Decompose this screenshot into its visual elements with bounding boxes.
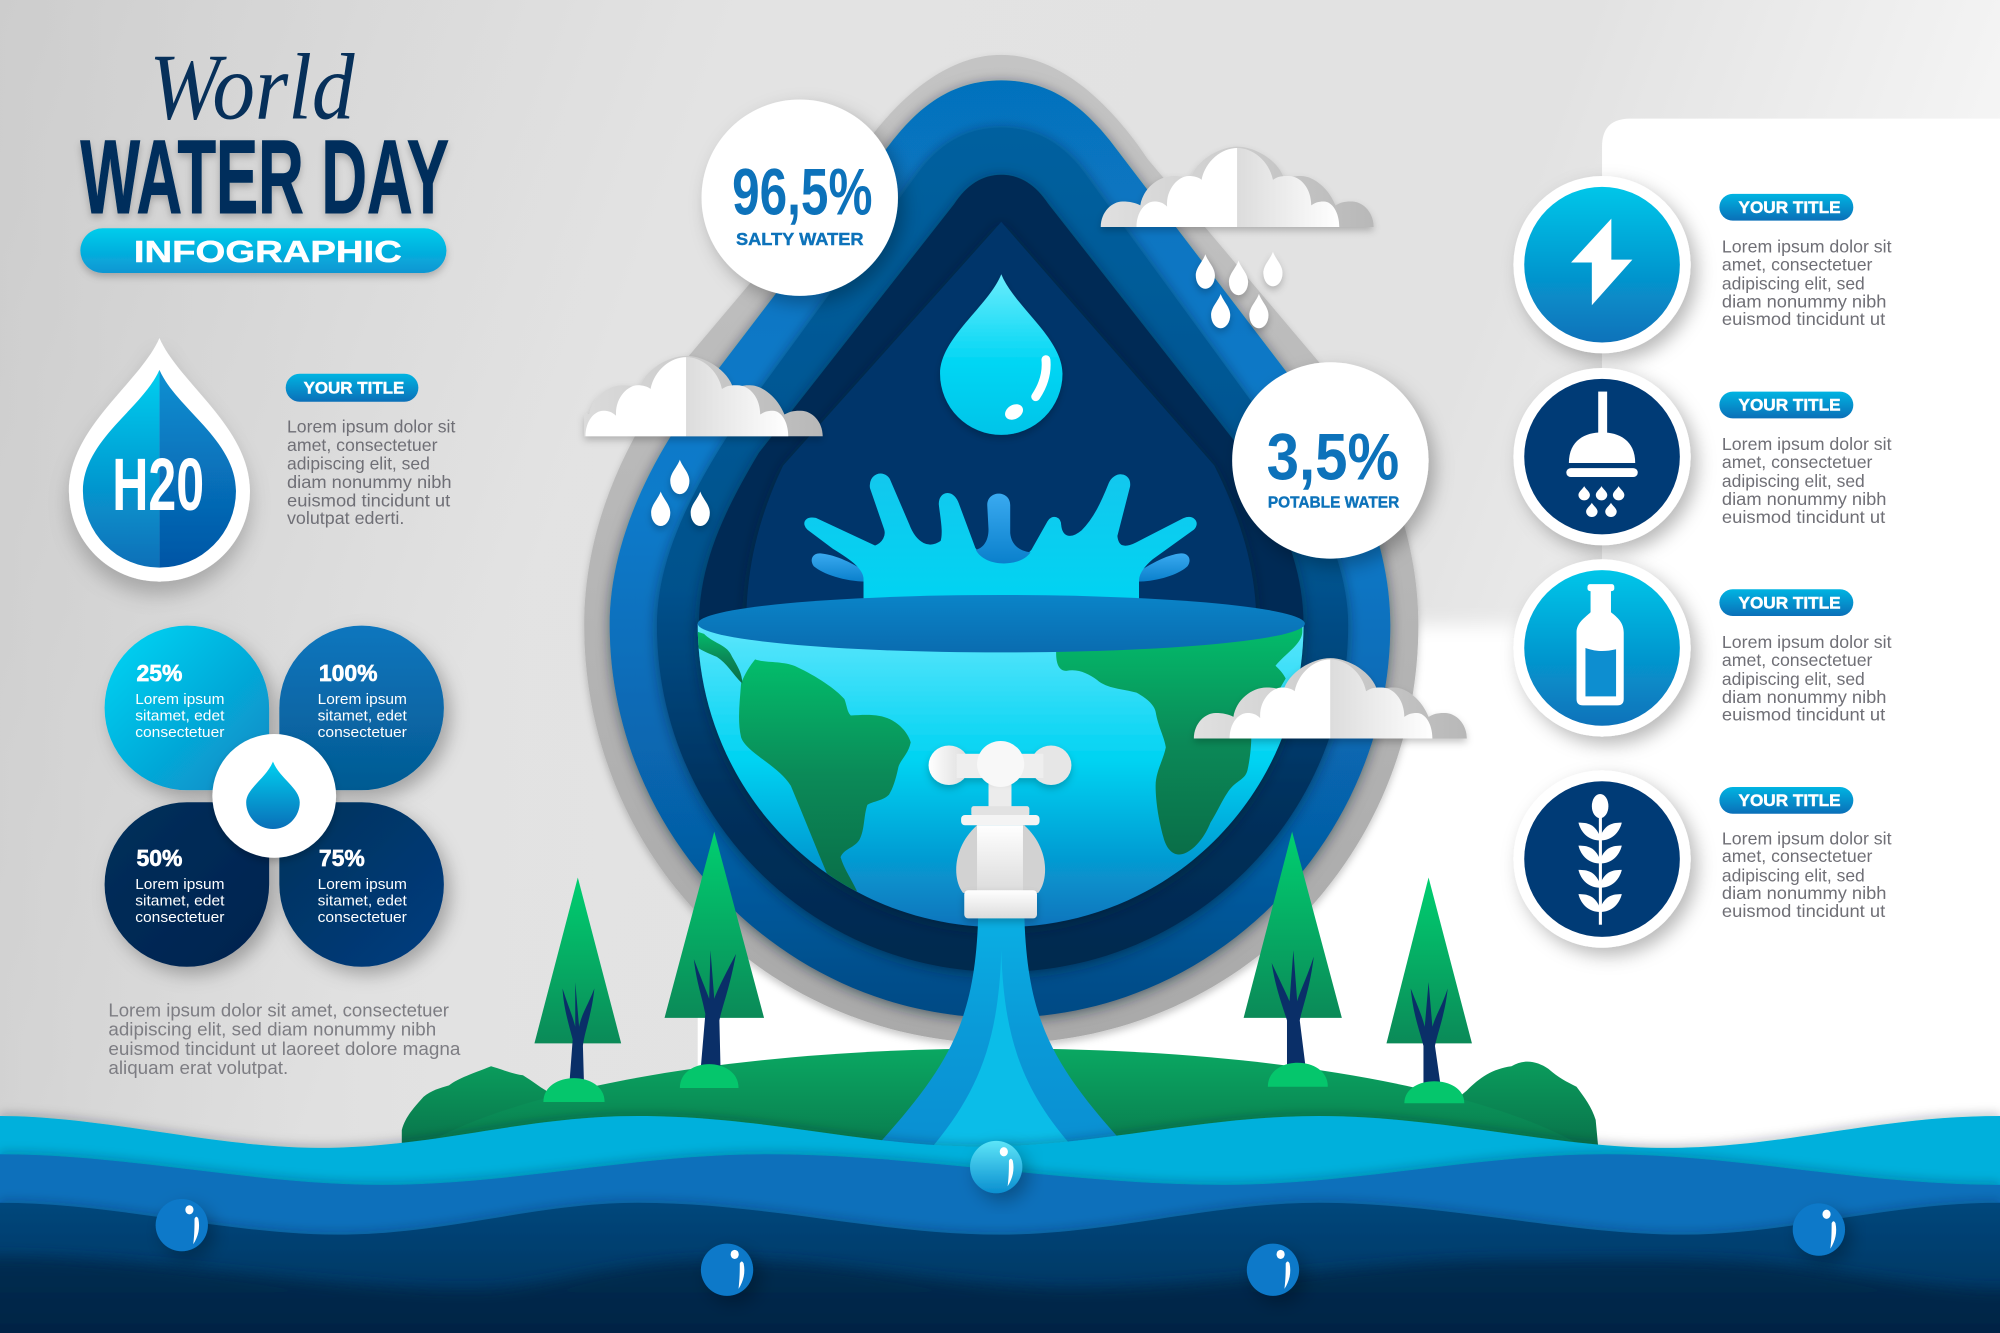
text: adipiscing elit, sed [1722, 471, 1865, 491]
labels 50%: sitamet, edet [135, 893, 225, 910]
bubble: potable water: 3,5% [1267, 421, 1399, 495]
text: amet, consectetuer [1722, 254, 1873, 274]
text: euismod tincidunt ut [1722, 309, 1885, 329]
petal 25% [105, 626, 269, 790]
H2O drop badge: H20 [112, 443, 204, 526]
text: Lorem ipsum dolor sit [1722, 434, 1892, 454]
labels 25%: 25% [136, 660, 182, 686]
continent: americas [696, 631, 911, 892]
water stream [875, 912, 1128, 1154]
bubble: potable water [1232, 362, 1429, 559]
bottom-left text block: Lorem ipsum dolor sit amet, consectetuer [108, 1000, 449, 1021]
text: euismod tincidunt ut [1722, 705, 1885, 725]
labels 75%: 75% [319, 845, 365, 871]
text: adipiscing elit, sed [1722, 865, 1865, 885]
outer grey layer [584, 55, 1418, 1043]
text: Lorem ipsum dolor sit [1722, 237, 1892, 257]
title block [80, 36, 449, 273]
text [1719, 589, 1892, 725]
water splash [808, 477, 1193, 606]
percent clover panel [105, 626, 444, 967]
labels 75%: sitamet, edet [318, 893, 408, 910]
icon: lightning [1513, 176, 1691, 353]
text: adipiscing elit, sed [1722, 274, 1865, 294]
trees [534, 832, 1472, 1103]
title: WATER DAY: WATER DAY [80, 119, 449, 236]
continent: africa [1056, 625, 1302, 855]
labels 100%: sitamet, edet [318, 708, 408, 725]
labels 50%: 50% [136, 845, 182, 871]
right list item 2: shower [1513, 368, 1892, 545]
labels 75% [318, 845, 408, 926]
labels 100% [318, 660, 408, 741]
water droplets on the ocean [156, 1141, 1845, 1296]
icon: bottle [1513, 559, 1691, 737]
cloud lower right [1194, 658, 1467, 739]
labels 25%: Lorem ipsum [135, 691, 224, 708]
bush right [1429, 1062, 1599, 1161]
bottom-left text block: euismod tincidunt ut laoreet dolore magna [108, 1038, 461, 1059]
title: World: World [149, 36, 355, 140]
bottom-left text block: adipiscing elit, sed diam nonummy nibh [108, 1019, 436, 1040]
icon: wheat [1513, 770, 1691, 948]
cloud left with rain [550, 356, 823, 526]
text: adipiscing elit, sed [1722, 669, 1865, 689]
bubble: salty water: SALTY WATER [736, 229, 864, 249]
labels 50% [135, 845, 225, 926]
H2O text block: adipiscing elit, sed [287, 453, 430, 473]
H2O text block: Lorem ipsum dolor sit [287, 416, 456, 436]
subtitle pill [80, 228, 446, 273]
bush left [402, 1066, 574, 1161]
blue layer [610, 80, 1390, 1018]
bubble: potable water: POTABLE WATER [1268, 495, 1400, 512]
tree 1 [534, 878, 621, 1091]
petal 75% [279, 802, 444, 967]
globe bowl [696, 595, 1305, 927]
mid blue layer [657, 128, 1348, 972]
text: YOUR TITLE [1739, 593, 1841, 612]
H2O text block [286, 374, 456, 528]
bottom-left text block: aliquam erat volutpat. [108, 1057, 288, 1078]
center drop [212, 734, 336, 858]
text: amet, consectetuer [1722, 650, 1873, 670]
text: YOUR TITLE [1739, 198, 1841, 217]
text: diam nonummy nibh [1722, 291, 1886, 311]
H2O text block: euismod tincidunt ut [287, 490, 450, 510]
cloud top right with rain [1101, 147, 1374, 328]
text: YOUR TITLE [1739, 396, 1841, 415]
subtitle pill: INFOGRAPHIC [134, 235, 402, 269]
labels 100%: 100% [319, 660, 378, 686]
text: YOUR TITLE [1739, 791, 1841, 810]
text: Lorem ipsum dolor sit [1722, 828, 1892, 848]
ground [430, 1048, 1574, 1161]
labels 100%: consectetuer [318, 724, 407, 741]
labels 75%: Lorem ipsum [318, 876, 407, 893]
tree 4 [1386, 878, 1472, 1091]
text [1719, 392, 1892, 527]
central paper-cut water drop [584, 55, 1418, 1043]
right list item 4: wheat [1513, 770, 1892, 948]
text: amet, consectetuer [1722, 452, 1873, 472]
globe rim ellipse [698, 595, 1305, 652]
text [1719, 194, 1892, 329]
right list item 3: bottle [1513, 559, 1892, 737]
icon: shower [1513, 368, 1691, 545]
text: euismod tincidunt ut [1722, 507, 1885, 527]
labels 50%: consectetuer [135, 909, 224, 926]
faucet [929, 741, 1071, 918]
labels 25%: consectetuer [135, 724, 224, 741]
text [1719, 787, 1892, 921]
bottom-left text block [108, 1000, 461, 1078]
bubble: salty water [702, 99, 898, 296]
text: euismod tincidunt ut [1722, 901, 1885, 921]
big water drop [940, 274, 1062, 435]
inner layer [746, 222, 1256, 625]
right list item 1: energy [1513, 176, 1892, 353]
H2O text block: diam nonummy nibh [287, 472, 452, 492]
text: diam nonummy nibh [1722, 687, 1886, 707]
text: diam nonummy nibh [1722, 489, 1886, 509]
ocean waves [0, 1116, 2000, 1333]
labels 75%: consectetuer [318, 909, 407, 926]
navy layer [699, 175, 1304, 625]
hill and bushes [402, 1048, 1599, 1161]
text: diam nonummy nibh [1722, 883, 1886, 903]
text: Lorem ipsum dolor sit [1722, 632, 1892, 652]
labels 100%: Lorem ipsum [318, 691, 407, 708]
bubble: salty water: 96,5% [732, 155, 872, 229]
petal 100% [279, 626, 444, 790]
text: amet, consectetuer [1722, 846, 1873, 866]
petal 50% [105, 802, 269, 967]
H2O drop badge [69, 338, 250, 582]
labels 25% [135, 660, 225, 741]
H2O text block: volutpat ederti. [287, 508, 404, 528]
tree mounds [543, 1063, 1464, 1103]
right white panel [1602, 119, 2000, 1161]
tree 3 [1244, 832, 1342, 1071]
H2O text block: amet, consectetuer [287, 435, 438, 455]
labels 50%: Lorem ipsum [135, 876, 224, 893]
H2O text block: YOUR TITLE [304, 378, 404, 397]
tree 2 [665, 832, 764, 1074]
labels 25%: sitamet, edet [135, 708, 225, 725]
